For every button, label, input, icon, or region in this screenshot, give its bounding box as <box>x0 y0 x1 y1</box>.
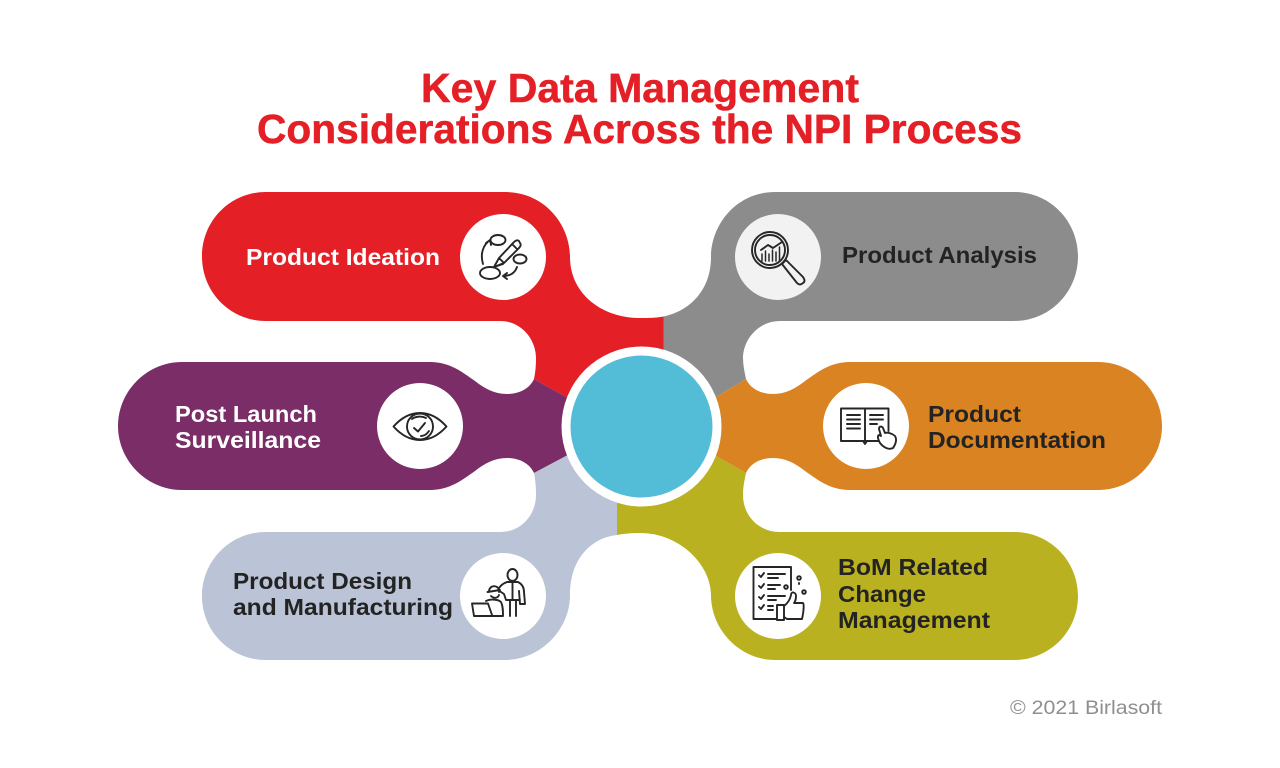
copyright: © 2021 Birlasoft <box>1010 697 1163 719</box>
label: bom related change management: BoM Related <box>838 554 988 580</box>
label: product documentation: Product <box>928 401 1021 427</box>
panel: post launch surveillance <box>118 362 642 490</box>
title: Key Data Management <box>421 65 859 111</box>
orange petal shape <box>642 362 1162 490</box>
light blue petal shape <box>202 426 642 660</box>
gray petal shape <box>642 192 1078 426</box>
icon: eye with check <box>377 383 463 469</box>
title <box>257 65 1022 152</box>
label: post launch surveillance <box>175 401 321 453</box>
red petal shape <box>202 192 664 426</box>
icon: checklist with thumbs up <box>735 553 821 639</box>
label: product ideation: Product Ideation <box>246 244 440 270</box>
label: product analysis: Product Analysis <box>842 242 1037 268</box>
panel: product documentation <box>642 362 1162 490</box>
panel: product analysis <box>642 192 1078 426</box>
panel: product ideation <box>202 192 664 426</box>
label: product documentation: Documentation <box>928 427 1106 453</box>
label: product design and manufacturing: Product Design <box>233 568 412 594</box>
label: product documentation <box>928 401 1106 453</box>
icon: engineer and manager <box>460 553 546 639</box>
purple petal shape <box>118 362 642 490</box>
icon: magnifier with chart <box>735 214 821 300</box>
center circle <box>562 346 722 506</box>
icon: pencil and ideas <box>460 214 546 300</box>
label: bom related change management <box>838 554 990 633</box>
icon: open book with hand <box>823 383 909 469</box>
panel: product design and manufacturing <box>202 426 642 660</box>
title: Considerations Across the NPI Process <box>257 106 1022 152</box>
label: bom related change management: Change <box>838 581 926 607</box>
label: product design and manufacturing <box>233 568 453 620</box>
label: post launch surveillance: Post Launch <box>175 401 317 427</box>
label: bom related change management: Management <box>838 607 990 633</box>
label: product design and manufacturing: and Manufacturing <box>233 594 453 620</box>
panel: bom related change management <box>617 426 1078 660</box>
olive petal shape <box>617 426 1078 660</box>
label: post launch surveillance: Surveillance <box>175 427 321 453</box>
